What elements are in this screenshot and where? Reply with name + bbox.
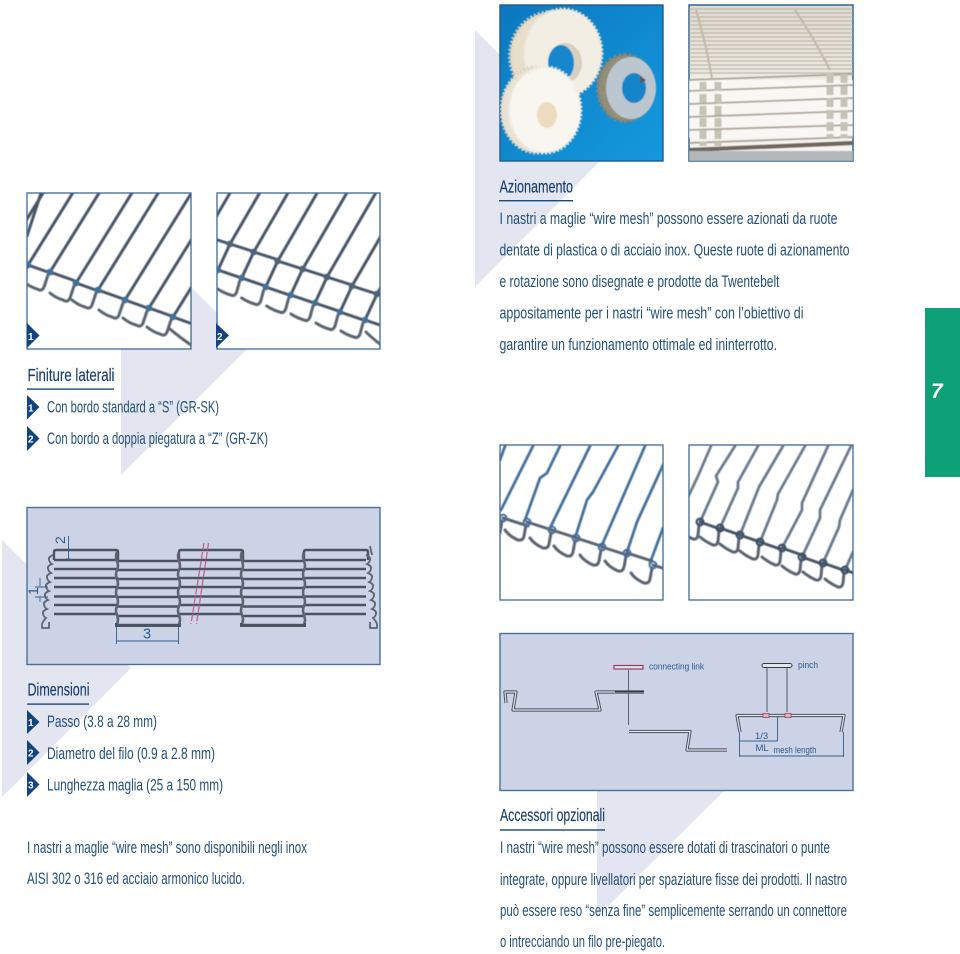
text block: Azionamento: I nastri a maglie “wire mesh” possono essere azionati da ruote <box>500 209 838 228</box>
wire profile right with measures: ML <box>756 743 769 754</box>
wire profile right with measures <box>737 714 844 757</box>
photo: wire mesh belt <box>689 5 853 161</box>
text block: Azionamento: e rotazione sono disegnate e prodotte da Twentebelt <box>500 272 780 291</box>
metal sprocket <box>598 55 656 121</box>
background chevron: lateral finishes <box>121 217 250 475</box>
background chevron: dimensions <box>2 540 131 797</box>
wire profile right with measures: 1/3 <box>755 731 768 742</box>
text block: materials: I nastri a maglie “wire mesh” sono disponibili negli inox <box>27 838 307 857</box>
list item 2: wire diameter <box>27 740 215 765</box>
list item 1: pitch: Passo (3.8 a 28 mm) <box>47 712 157 731</box>
dimension 2 <box>52 536 71 559</box>
heading: Azionamento <box>499 177 573 201</box>
list item 1: pitch: 1 <box>28 718 34 729</box>
text block: Azionamento: garantire un funzionamento ottimale ed ininterrotto. <box>500 335 777 354</box>
connecting link: connecting link <box>649 662 704 672</box>
heading: Dimensioni: Dimensioni <box>28 680 90 700</box>
heading: Accessori opzionali <box>500 805 605 831</box>
list item 2: Z edge <box>27 426 268 451</box>
background chevron: top right <box>475 30 603 287</box>
dimension 1 <box>25 578 48 602</box>
wire profile left <box>505 691 644 710</box>
break mark <box>191 543 208 624</box>
heading: Azionamento: Azionamento <box>500 177 573 197</box>
dimension 3: 3 <box>143 626 151 642</box>
text block: Azionamento: appositamente per i nastri “wire mesh” con l’obiettivo di <box>500 304 804 322</box>
list item 2: wire diameter: 2 <box>28 748 34 760</box>
list item 3: mesh length <box>27 772 223 797</box>
wire profile middle <box>629 732 727 750</box>
dimension 2: 2 <box>52 536 68 544</box>
dimension 1: 1 <box>25 587 41 595</box>
list item 3: mesh length: Lunghezza maglia (25 a 150 mm) <box>47 776 223 795</box>
list item 3: mesh length: 3 <box>28 780 34 792</box>
list item 2: wire diameter: Diametro del filo (0.9 a 2.8 mm) <box>47 744 215 763</box>
dimension 3 <box>116 626 178 644</box>
panel: accessories diagram <box>500 634 853 790</box>
heading: Accessori opzionali: Accessori opzionali <box>500 805 605 825</box>
wire mesh drawing <box>42 546 377 628</box>
chapter tab 7 <box>925 308 960 477</box>
marker 1: 1 <box>28 332 34 343</box>
text block: accessories <box>500 838 847 951</box>
wire profile right with measures: mesh length <box>774 745 816 756</box>
text block: materials: AISI 302 o 316 ed acciaio armonico lucido. <box>27 869 245 888</box>
list item 2: Z edge: Con bordo a doppia piegatura a “Z” (GR-ZK) <box>47 429 268 448</box>
marker 2: 2 <box>217 332 223 343</box>
photo: double Z edge mesh <box>216 192 381 350</box>
text block: Azionamento <box>500 209 850 354</box>
panel: dimensions diagram <box>25 508 380 664</box>
pinch <box>762 660 818 712</box>
large plastic gear <box>510 9 602 100</box>
photo: mesh with kinked wires <box>499 444 664 601</box>
connecting link <box>614 662 704 725</box>
heading: Finiture laterali: Finiture laterali <box>28 365 114 385</box>
list item 1: S edge: 1 <box>28 404 34 414</box>
text block: materials <box>27 838 307 888</box>
heading: Dimensioni <box>27 680 90 705</box>
heading: Finiture laterali <box>27 365 114 390</box>
photo: drive sprockets <box>500 5 663 161</box>
list item 1: S edge: Con bordo standard a “S” (GR-SK) <box>47 398 219 417</box>
marker 2 <box>216 323 229 348</box>
pinch: pinch <box>798 660 818 671</box>
front plastic gear <box>501 67 581 153</box>
list item 1: pitch <box>27 710 157 734</box>
list item 2: Z edge: 2 <box>28 434 34 446</box>
marker 1 <box>27 323 40 348</box>
list item 1: S edge <box>27 395 219 420</box>
photo: mesh with crimped wires <box>680 445 865 600</box>
text block: accessories: o intrecciando un filo pre-piegato. <box>500 932 665 951</box>
background chevron: accessories <box>597 660 727 917</box>
photo: standard S edge mesh <box>26 192 192 350</box>
chapter tab 7: 7 <box>931 380 944 403</box>
